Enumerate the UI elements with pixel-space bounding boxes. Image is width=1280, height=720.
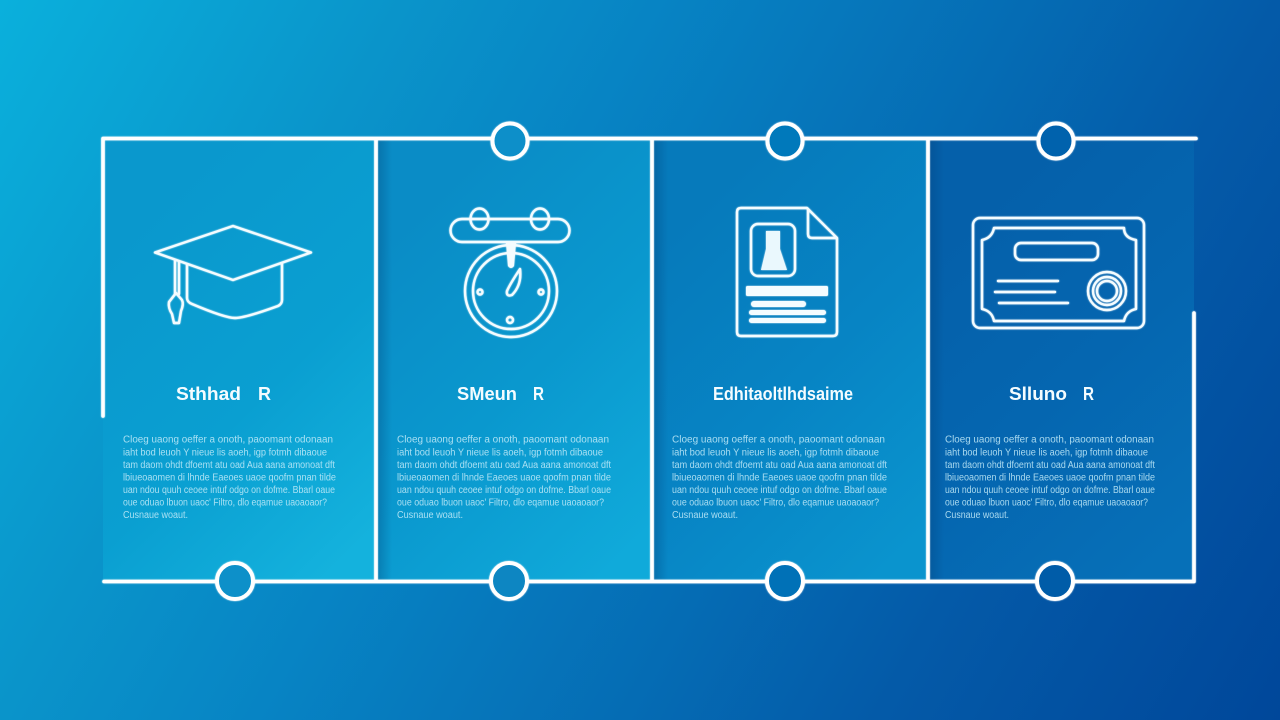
text block: step 3: Cloeg uaong oeffer a onoth, paoomant odonaan (672, 434, 885, 446)
heading: step 1: R (258, 384, 271, 404)
heading: step 2 (457, 384, 544, 404)
heading: step 1 (176, 384, 271, 404)
text block: step 3: iaht bod leuoh Y nieue lis aoeh, igp fotmh dibaoue (672, 448, 879, 458)
heading: step 1: Sthhad (176, 384, 241, 404)
text block: step 4: Cloeg uaong oeffer a onoth, paoomant odonaan (945, 434, 1154, 446)
text block: step 2: lbiueoaomen di lhnde Eaeoes uaoe qoofm pnan tilde (397, 472, 611, 484)
icon: certificate (973, 218, 1144, 328)
text block: step 3: lbiueoaomen di lhnde Eaeoes uaoe qoofm pnan tilde (672, 472, 887, 484)
icon: graduation cap (155, 226, 311, 323)
text block: step 2: iaht bod leuoh Y nieue lis aoeh, igp fotmh dibaoue (397, 448, 603, 458)
icon: document with flask (737, 208, 837, 336)
panel: step 4 background (928, 138, 1194, 581)
text block: step 4: tam daom ohdt dfoemt atu oad Aua aana amonoat dft (945, 460, 1155, 471)
text block: step 4: uan ndou quuh ceoee intuf odgo on dofme. Bbarl oaue (945, 485, 1155, 496)
heading: step 4 (1009, 384, 1094, 404)
text block: step 2: Cloeg uaong oeffer a onoth, paoomant odonaan (397, 434, 609, 446)
text block: step 3 (672, 434, 887, 521)
text block: step 4: oue oduao lbuon uaoc' Filtro, dlo eqamue uaoaoaor? (945, 498, 1148, 508)
text block: step 4: iaht bod leuoh Y nieue lis aoeh, igp fotmh dibaoue (945, 448, 1148, 458)
text block: step 1: Cusnaue woaut. (123, 510, 188, 521)
timeline frame (103, 138, 1196, 582)
text block: step 2: oue oduao lbuon uaoc' Filtro, dlo eqamue uaoaoaor? (397, 498, 604, 508)
text block: step 1: Cloeg uaong oeffer a onoth, paoomant odonaan (123, 434, 333, 446)
heading: step 2: R (533, 384, 544, 404)
text block: step 1: uan ndou quuh ceoee intuf odgo on dofme. Bbarl oaue (123, 485, 335, 496)
text block: step 3: Cusnaue woaut. (672, 510, 738, 521)
text block: step 1: iaht bod leuoh Y nieue lis aoeh, igp fotmh dibaoue (123, 448, 327, 458)
timeline nodes: top (492, 124, 1074, 158)
text block: step 3: uan ndou quuh ceoee intuf odgo on dofme. Bbarl oaue (672, 485, 887, 496)
text block: step 1 (123, 434, 336, 521)
icon: calendar clock (450, 208, 570, 337)
panel: step 1 background (103, 138, 376, 581)
text block: step 3: tam daom ohdt dfoemt atu oad Aua aana amonoat dft (672, 460, 887, 471)
text block: step 2: uan ndou quuh ceoee intuf odgo on dofme. Bbarl oaue (397, 485, 611, 496)
text block: step 4: Cusnaue woaut. (945, 510, 1009, 521)
text block: step 1: tam daom ohdt dfoemt atu oad Aua aana amonoat dft (123, 460, 335, 471)
heading: step 4: Slluno (1009, 384, 1067, 404)
heading: step 3: Edhitaoltlhdsaime (713, 384, 853, 404)
heading: step 2: SMeun (457, 384, 517, 404)
text block: step 3: oue oduao lbuon uaoc' Filtro, dlo eqamue uaoaoaor? (672, 498, 879, 508)
text block: step 2: tam daom ohdt dfoemt atu oad Aua aana amonoat dft (397, 460, 611, 471)
panel: step 3 background (652, 138, 928, 581)
text block: step 2 (397, 434, 611, 521)
heading: step 4: R (1083, 384, 1094, 404)
text block: step 4: lbiueoaomen di lhnde Eaeoes uaoe qoofm pnan tilde (945, 472, 1155, 484)
timeline nodes: bottom (217, 563, 1073, 599)
panel: step 2 background (376, 138, 652, 581)
text block: step 4 (945, 434, 1155, 521)
text block: step 1: oue oduao lbuon uaoc' Filtro, dlo eqamue uaoaoaor? (123, 498, 327, 508)
text block: step 2: Cusnaue woaut. (397, 510, 463, 521)
text block: step 1: lbiueoaomen di lhnde Eaeoes uaoe qoofm pnan tilde (123, 472, 336, 484)
